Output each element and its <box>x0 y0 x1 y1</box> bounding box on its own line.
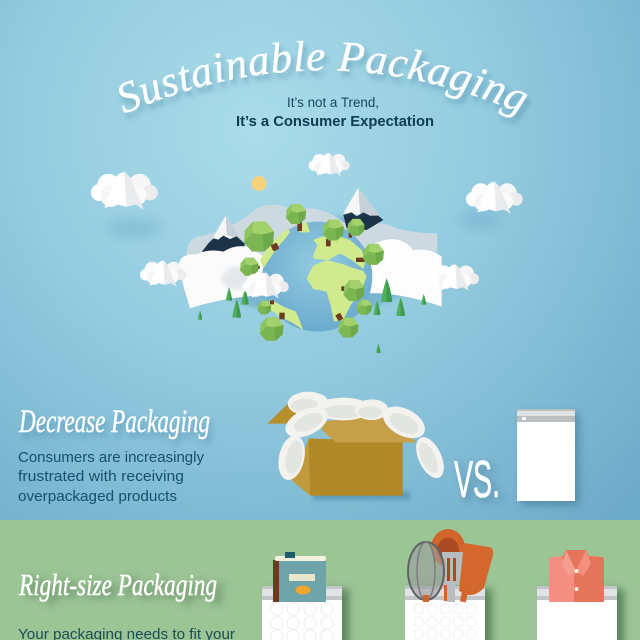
text: decrease packaging body: Consumers are increasingly <box>18 450 205 466</box>
white paper cloud: right <box>363 239 442 307</box>
tree: globe top right <box>347 219 364 238</box>
shirt <box>549 550 604 602</box>
tree: left small <box>240 257 260 276</box>
tree: lower right <box>335 313 358 338</box>
box back flap <box>267 403 307 424</box>
cloud: top right <box>458 180 523 228</box>
tree: globe top <box>323 219 344 246</box>
text: decrease packaging body: frustrated with receiving <box>18 469 184 485</box>
tree: top <box>286 204 306 231</box>
cloud: lower right <box>432 263 479 291</box>
subtitle <box>236 95 434 130</box>
mailer with shirt <box>537 550 617 640</box>
whisk <box>408 542 444 602</box>
illustration: overpacked box <box>267 392 450 500</box>
tree: lower right small <box>357 300 372 315</box>
vs label: VS. <box>454 451 500 509</box>
subtitle: It’s not a Trend, <box>287 95 379 110</box>
cones <box>198 278 426 353</box>
subtitle: It’s a Consumer Expectation <box>236 114 434 130</box>
cloud: top left <box>91 170 163 237</box>
text: decrease packaging body <box>18 450 205 505</box>
paper fold shading: left <box>222 267 252 290</box>
cloud: lower left <box>140 260 186 286</box>
heading: right-size packaging: Right-size Packaging <box>18 567 217 602</box>
bubble wrap <box>414 604 476 639</box>
mailer with book <box>262 552 342 640</box>
wooden spoon <box>431 529 465 601</box>
tree: lower left small <box>258 300 274 314</box>
mailer with kitchen utensils <box>405 529 493 640</box>
packing peanuts <box>275 392 450 482</box>
green section background <box>0 520 640 640</box>
continents <box>260 222 367 330</box>
tree: Africa <box>341 280 364 301</box>
cloud: top center <box>309 152 350 176</box>
illustration: slim mailer <box>517 409 575 501</box>
book <box>273 552 326 602</box>
metal slotted turner <box>442 552 463 602</box>
bubble wrap <box>271 603 333 640</box>
text: decrease packaging body: overpackaged products <box>18 489 177 505</box>
tree: large left <box>244 222 279 252</box>
heading: decrease packaging: Decrease Packaging <box>18 404 210 440</box>
orange spatula <box>459 543 493 602</box>
box front <box>308 438 403 496</box>
white paper cloud: left <box>179 246 280 308</box>
box top flap <box>322 413 417 442</box>
sun <box>252 176 266 191</box>
scene shadow <box>203 215 423 315</box>
back grey clouds <box>187 205 437 272</box>
globe <box>262 222 372 332</box>
box shadow <box>313 492 410 500</box>
box left side <box>292 440 310 496</box>
cloud: middle <box>242 271 289 298</box>
mountain: left <box>202 216 245 258</box>
tree: lower left <box>260 313 285 341</box>
earth scene <box>179 188 442 353</box>
title: Sustainable Packaging <box>118 40 532 125</box>
tree: right <box>356 244 384 265</box>
mountain: right <box>343 188 383 230</box>
